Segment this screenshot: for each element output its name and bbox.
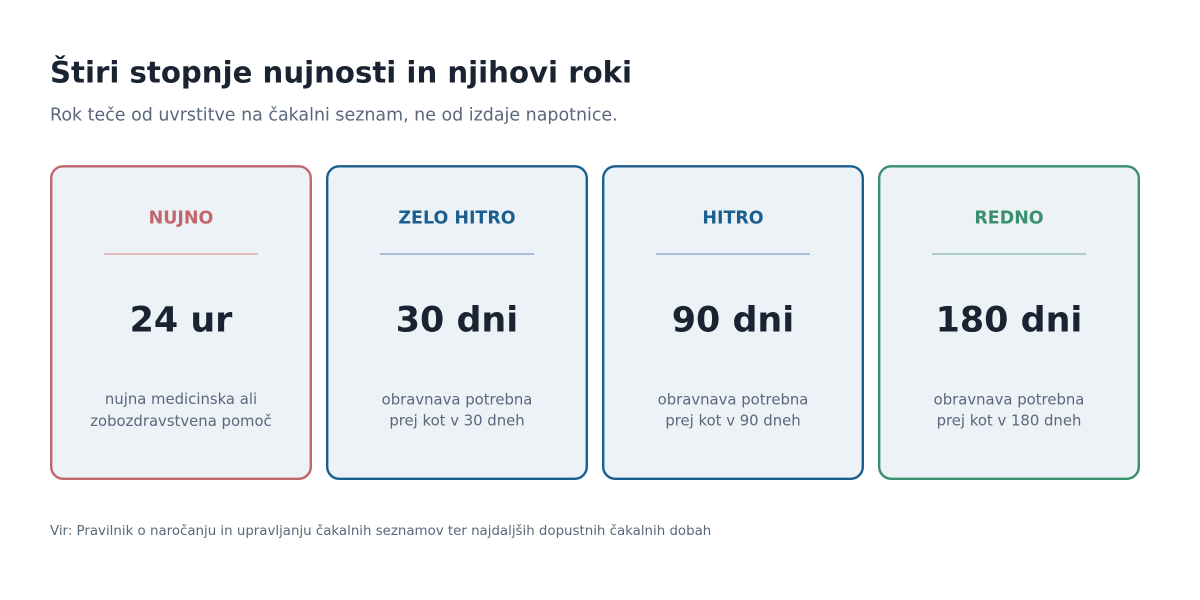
label: zelo hitro: ZELO HITRO [398,208,516,228]
subtitle: Rok teče od uvrstitve na čakalni seznam, ne od izdaje napotnice. [50,105,618,125]
description: hitro: prej kot v 90 dneh [665,411,801,429]
source note: Vir: Pravilnik o naročanju in upravljanju čakalnih seznamov ter najdaljših dopustnih čakalnih dobah [50,523,711,539]
description: nujno: nujna medicinska ali [105,390,257,408]
title: Štiri stopnje nujnosti in njihovi roki [50,55,632,89]
panel: hitro [603,166,863,479]
description: zelo hitro: obravnava potrebna [382,390,532,408]
panel: zelo hitro [327,166,587,479]
panel: nujno [51,166,311,479]
description: zelo hitro: prej kot v 30 dneh [389,411,525,429]
description: nujno: zobozdravstvena pomoč [90,412,272,430]
description: hitro: obravnava potrebna [658,390,808,408]
description: redno: prej kot v 180 dneh [937,411,1081,429]
panel: redno [879,166,1139,479]
value: 24 ur: 24 ur [130,300,233,340]
value: 30 dni: 30 dni [396,300,518,340]
label: hitro: HITRO [702,208,764,228]
label: redno: REDNO [974,208,1044,228]
description: redno: obravnava potrebna [934,390,1084,408]
label: nujno: NUJNO [149,208,213,228]
value: 90 dni: 90 dni [672,300,794,340]
value: 180 dni: 180 dni [936,300,1082,340]
